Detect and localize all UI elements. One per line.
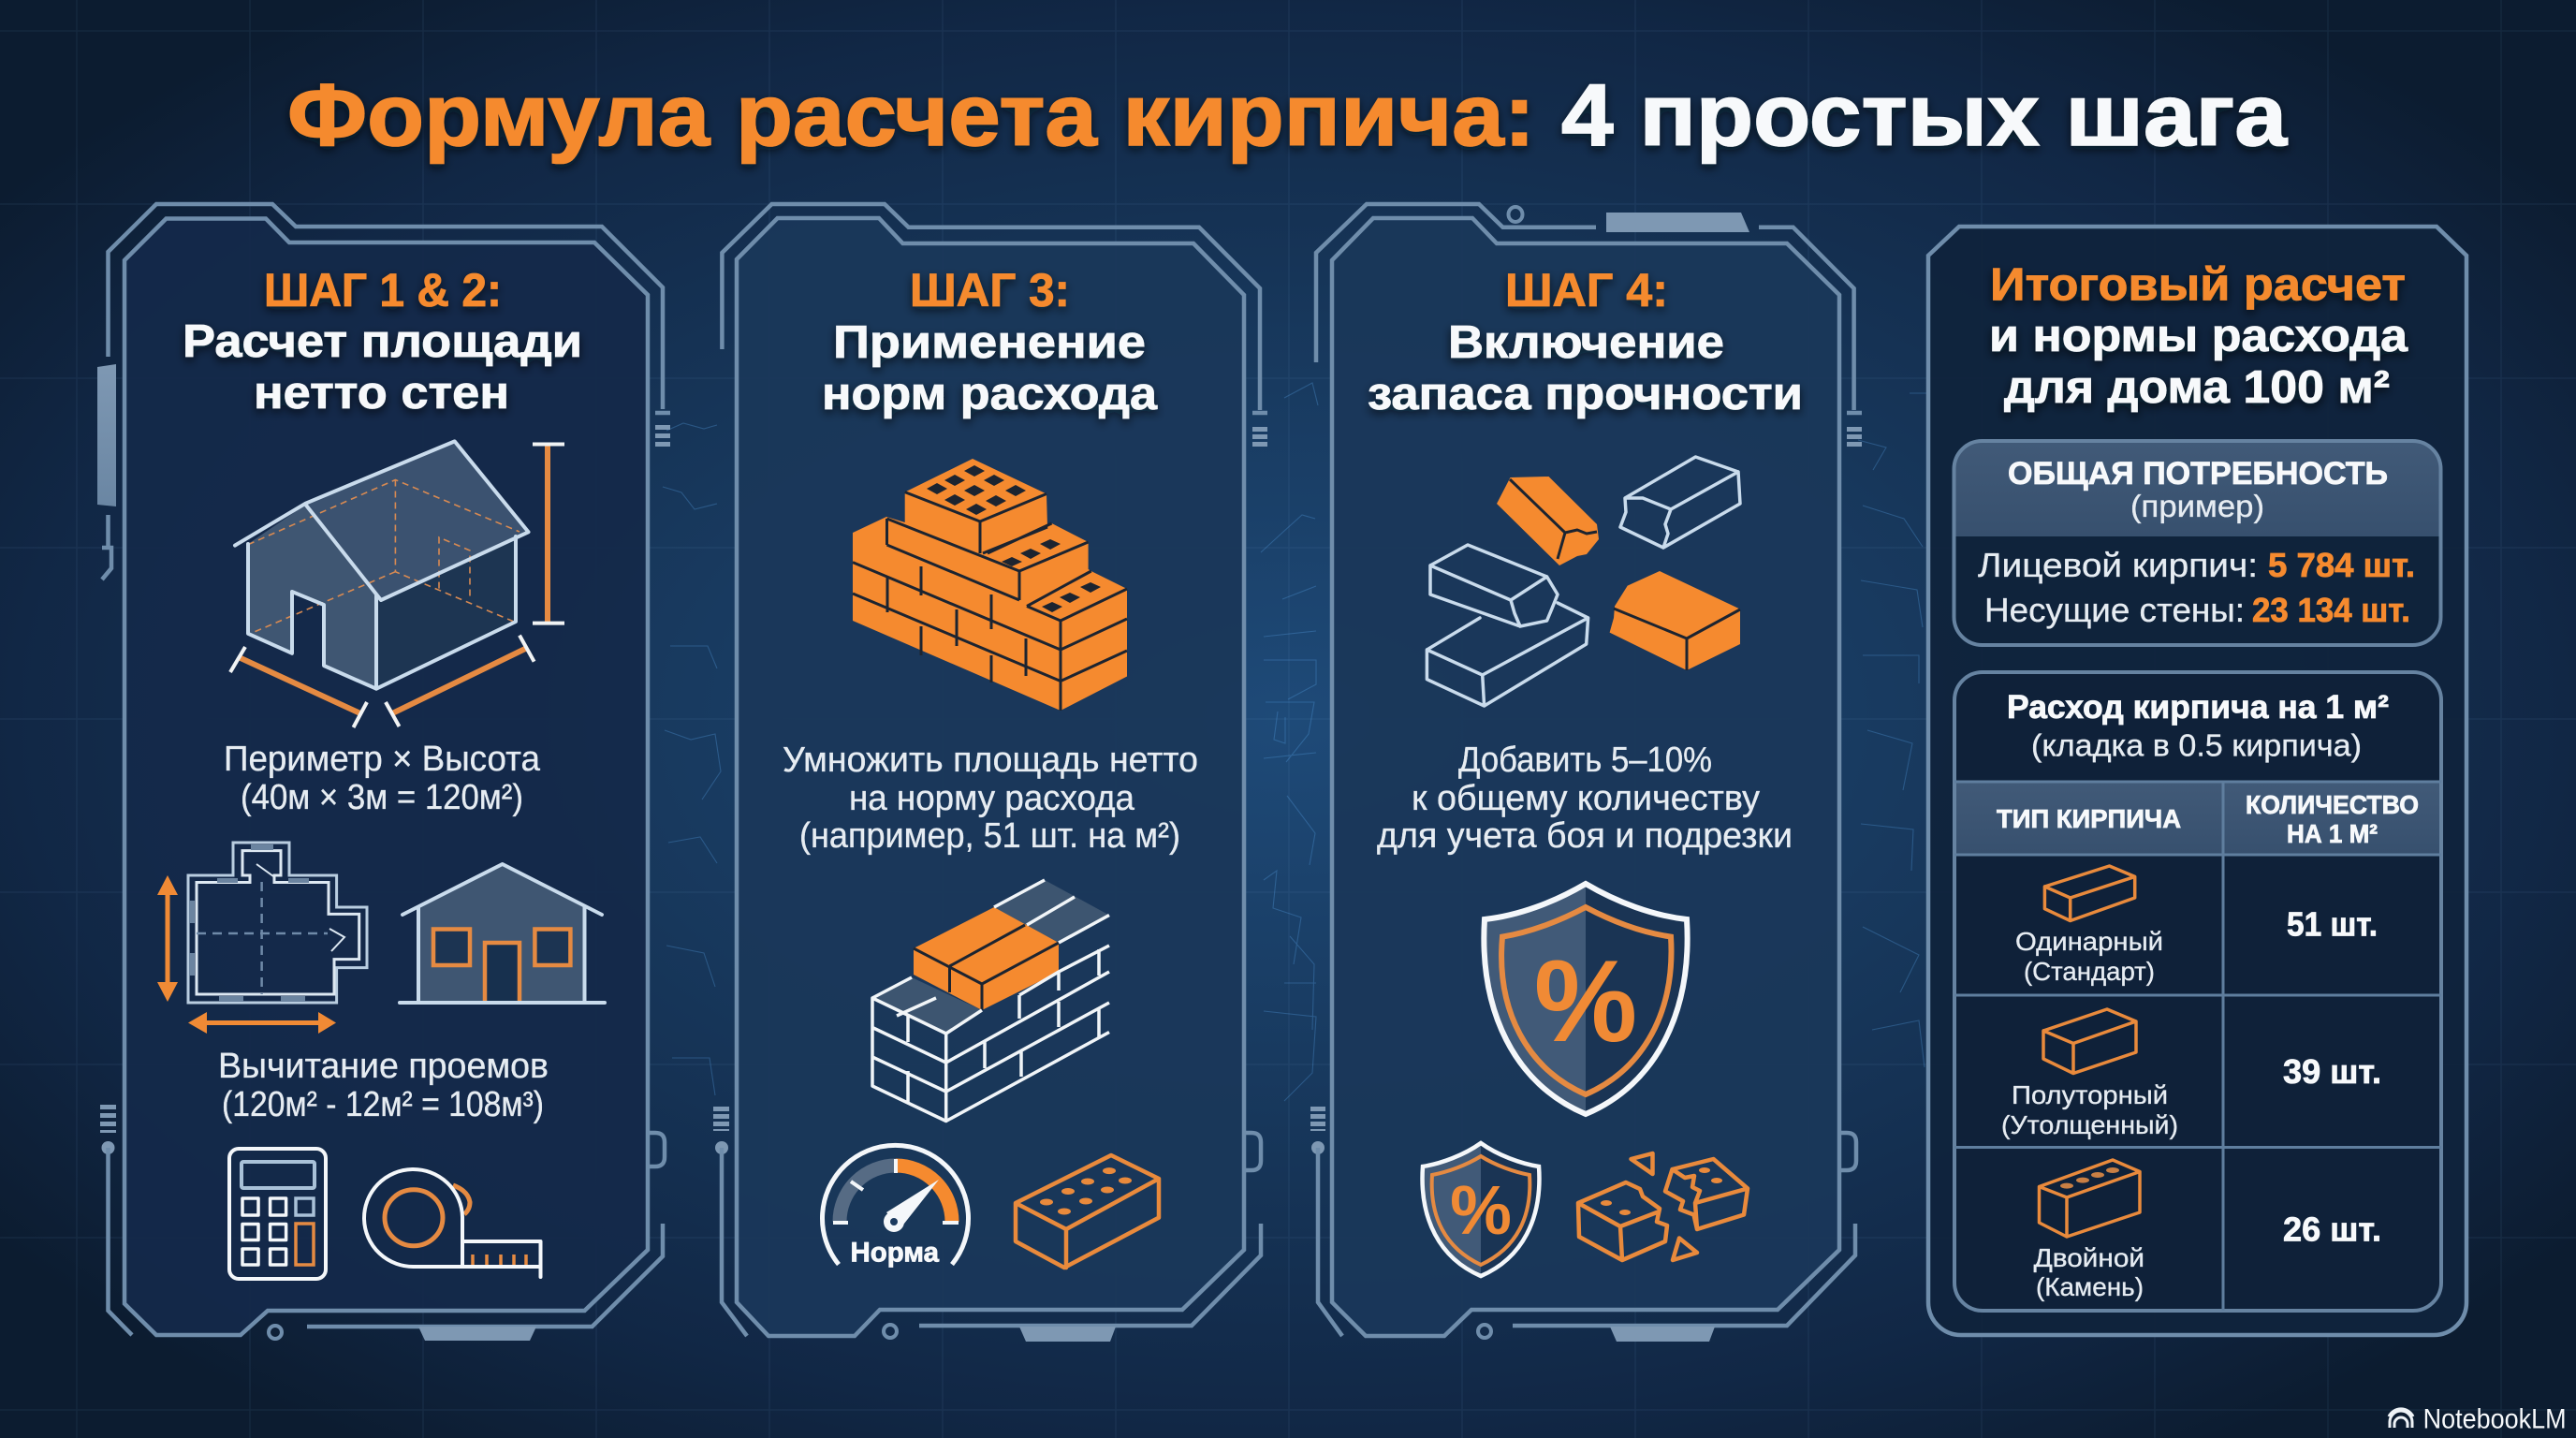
panel: consumption table: НА 1 М² xyxy=(2287,819,2378,848)
icon: house elevation with openings xyxy=(400,864,605,1003)
text: add 5-10 percent: к общему количеству xyxy=(1412,779,1760,818)
row label: single brick xyxy=(2015,927,2163,986)
value: 51: 51 шт. xyxy=(2287,904,2378,944)
icon: wireframe wall with orange bricks xyxy=(872,880,1109,1122)
panel: total demand: (пример) xyxy=(2130,489,2264,523)
panel: consumption table: (кладка в 0.5 кирпича) xyxy=(2031,728,2362,762)
text: add 5-10 percent xyxy=(1377,741,1793,856)
heading: step 1 and 2: нетто стен xyxy=(254,368,509,418)
row label: one-and-a-half brick xyxy=(2001,1080,2178,1139)
panel: consumption table: КОЛИЧЕСТВО xyxy=(2246,790,2419,819)
icon: single brick xyxy=(2044,866,2135,921)
panel: final calculation xyxy=(1928,227,2466,1335)
panel: total demand: 23 134 шт. xyxy=(2252,591,2410,629)
heading: step 3: норм расхода xyxy=(822,369,1158,419)
row label: one-and-a-half brick: (Утолщенный) xyxy=(2001,1110,2178,1139)
icon: orange brick stack xyxy=(853,459,1127,711)
panel: consumption table: Расход кирпича на 1 м² xyxy=(2007,689,2389,726)
heading: step 1 and 2 xyxy=(183,264,582,418)
icon: small percent shield: % xyxy=(1450,1171,1512,1249)
text: multiply by norm xyxy=(783,741,1198,856)
heading: step 1 and 2: ШАГ 1 & 2: xyxy=(264,264,502,316)
panel: step 4 xyxy=(1310,204,1862,1342)
heading: step 3: Применение xyxy=(833,317,1146,368)
icon: broken perforated brick xyxy=(1578,1153,1748,1260)
icon: floor plan with arrows xyxy=(157,843,367,1034)
title xyxy=(287,66,2288,164)
title: Формула расчета кирпича: xyxy=(287,66,1535,164)
text: subtract openings xyxy=(218,1047,549,1124)
row label: single brick: (Стандарт) xyxy=(2024,957,2155,986)
panel: step 1 and 2 xyxy=(97,204,670,1341)
row label: one-and-a-half brick: Полуторный xyxy=(2012,1080,2168,1109)
row label: double brick: Двойной xyxy=(2034,1243,2144,1272)
icon: double brick xyxy=(2039,1160,2140,1237)
panel: total demand: Несущие стены: xyxy=(1984,591,2245,629)
icon: large percent shield: % xyxy=(1534,937,1637,1066)
text: perimeter times height: Периметр × Высота xyxy=(224,740,541,779)
panel: step 3 xyxy=(713,204,1267,1342)
value: 26: 26 шт. xyxy=(2283,1210,2381,1249)
icon: one-and-a-half brick xyxy=(2043,1009,2136,1073)
panel: total demand: 5 784 шт. xyxy=(2268,546,2415,584)
row label: double brick xyxy=(2034,1243,2144,1301)
heading: step 4 xyxy=(1368,264,1803,419)
icon: tape measure xyxy=(364,1169,541,1277)
panel: consumption table xyxy=(1954,672,2441,1311)
panel: total demand: ОБЩАЯ ПОТРЕБНОСТЬ xyxy=(2008,456,2388,492)
panel: consumption table: ТИП КИРПИЧА xyxy=(1997,804,2181,833)
panel: total demand: Лицевой кирпич: xyxy=(1978,546,2258,584)
icon: norm gauge xyxy=(823,1145,969,1268)
heading: step 4: ШАГ 4: xyxy=(1505,264,1668,316)
value: 39: 39 шт. xyxy=(2283,1052,2381,1091)
row label: double brick: (Камень) xyxy=(2036,1272,2144,1301)
heading: step 4: запаса прочности xyxy=(1368,369,1803,419)
heading: step 3 xyxy=(822,264,1158,419)
text: perimeter times height: (40м × 3м = 120м²) xyxy=(241,778,523,817)
heading: final calculation: и нормы расхода xyxy=(1989,311,2408,361)
icon: outlined perforated brick xyxy=(1016,1155,1159,1268)
icon: small percent shield xyxy=(1423,1143,1539,1276)
icon: norm gauge: Норма xyxy=(850,1238,939,1268)
text: multiply by norm: Умножить площадь нетто xyxy=(783,741,1198,780)
icon: large percent shield xyxy=(1484,884,1688,1114)
text: subtract openings: (120м² - 12м² = 108м³) xyxy=(222,1085,544,1124)
text: add 5-10 percent: для учета боя и подрезки xyxy=(1377,816,1793,856)
heading: step 1 and 2: Расчет площади xyxy=(183,316,582,367)
heading: final calculation xyxy=(1989,260,2408,413)
heading: step 4: Включение xyxy=(1448,317,1724,368)
text: perimeter times height xyxy=(224,740,541,817)
text: subtract openings: Вычитание проемов xyxy=(218,1047,549,1086)
heading: step 3: ШАГ 3: xyxy=(910,264,1070,316)
text: multiply by norm: (например, 51 шт. на м²) xyxy=(799,816,1180,856)
heading: final calculation: Итоговый расчет xyxy=(1990,260,2406,311)
icon: broken bricks xyxy=(1427,457,1740,706)
icon: calculator xyxy=(229,1149,326,1279)
title: 4 простых шага xyxy=(1561,66,2288,164)
row label: single brick: Одинарный xyxy=(2015,927,2163,956)
panel: total demand xyxy=(1954,441,2441,645)
icon: house wireframe with dimensions xyxy=(230,441,564,727)
text: add 5-10 percent: Добавить 5–10% xyxy=(1458,741,1712,780)
text: multiply by norm: на норму расхода xyxy=(849,779,1135,818)
heading: final calculation: для дома 100 м² xyxy=(2004,362,2390,413)
